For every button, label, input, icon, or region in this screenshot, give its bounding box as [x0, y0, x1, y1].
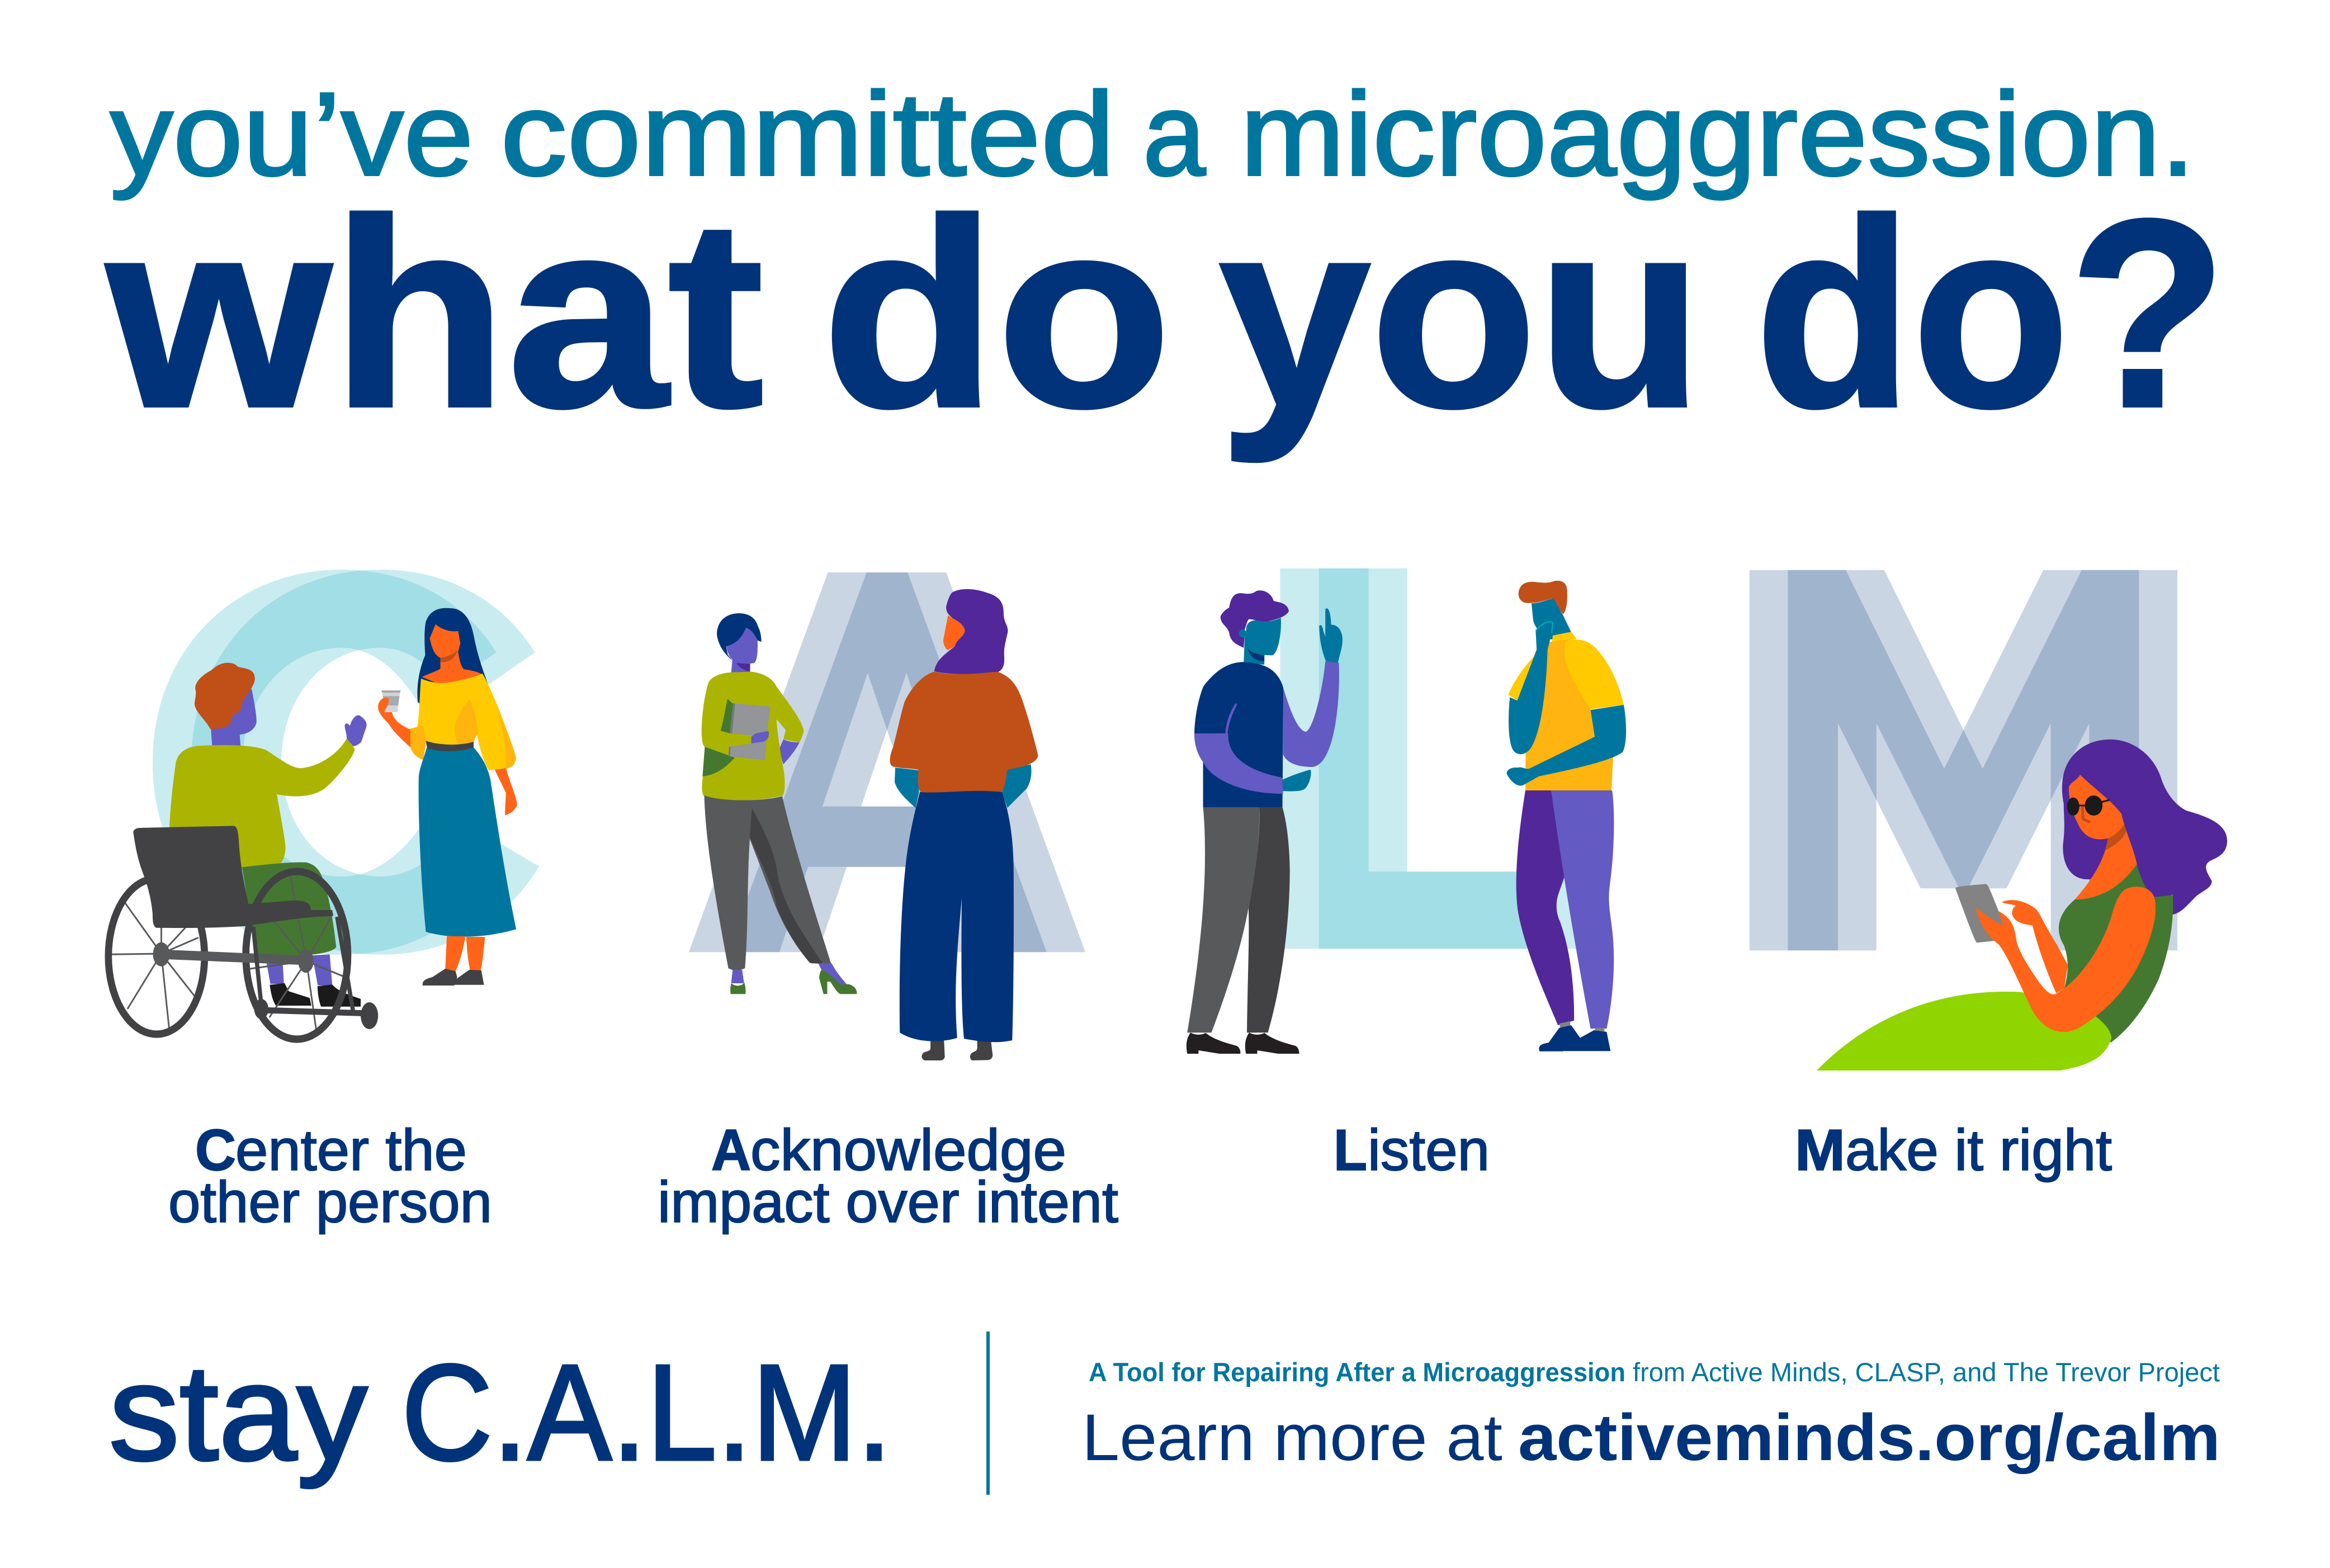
divider line — [986, 1332, 990, 1495]
letter M — [1750, 570, 2177, 950]
caption: acknowledge impact over intent: cknowledge — [750, 1118, 1066, 1183]
figure: person in headscarf seen from behind — [890, 589, 1038, 1060]
title: what do you do? — [102, 164, 2227, 465]
heading: you've committed a microaggression — [110, 68, 2195, 200]
heading: you've committed a microaggression: a — [1143, 68, 1206, 200]
caption: center the other person — [168, 1118, 492, 1235]
heading: you've committed a microaggression: you’ve — [110, 68, 474, 200]
caption: listen: L — [1334, 1118, 1367, 1183]
caption: acknowledge impact over intent: impact over intent — [658, 1170, 1118, 1235]
title: what do you do?: you — [1219, 164, 1703, 465]
title: what do you do?: do? — [1755, 164, 2227, 463]
caption: center the other person: other person — [168, 1170, 492, 1235]
letter A — [689, 572, 1085, 952]
figure: person holding a book — [702, 613, 857, 994]
figure: man with hand on chin — [1507, 581, 1626, 1051]
slogan: stay C.A.L.M.: C.A.L.M. — [401, 1336, 892, 1489]
caption: listen: isten — [1368, 1118, 1490, 1183]
text: learn more at activeminds.org/calm: activeminds.org/calm — [1518, 1401, 2220, 1475]
caption: make it right: ake it right — [1845, 1118, 2112, 1183]
heading: you've committed a microaggression: committed — [500, 68, 1115, 200]
letter C — [153, 570, 539, 955]
text: learn more at activeminds.org/calm — [1082, 1401, 2220, 1475]
figure: woman with sunglasses reading a tablet — [1817, 740, 2227, 1070]
text: tool attribution: A Tool for Repairing After a Microaggression — [1089, 1357, 1625, 1387]
panel: M, make it right illustration — [1750, 570, 2227, 1070]
panel: L, listen illustration — [1187, 569, 1626, 1054]
heading: you've committed a microaggression: microaggression. — [1240, 68, 2195, 200]
caption: acknowledge impact over intent — [658, 1118, 1118, 1235]
title: what do you do?: what — [102, 164, 764, 463]
caption: center the other person: C — [195, 1118, 236, 1183]
text: learn more at activeminds.org/calm: Learn more at — [1082, 1401, 1502, 1475]
caption: center the other person: enter the — [235, 1118, 467, 1183]
panel: A, acknowledge impact illustration — [689, 572, 1085, 1060]
slogan: stay C.A.L.M.: stay — [109, 1336, 367, 1489]
caption: acknowledge impact over intent: A — [711, 1118, 751, 1183]
panel: C, center the other person illustration — [108, 570, 539, 1039]
figure: man raising a finger — [1187, 590, 1343, 1054]
text: tool attribution — [1089, 1357, 2220, 1387]
title: what do you do?: do — [822, 164, 1171, 463]
letter L — [1280, 569, 1577, 949]
text: tool attribution: from Active Minds, CLASP, and The Trevor Project — [1633, 1357, 2220, 1387]
figure: person in wheelchair — [108, 663, 378, 1039]
figure: woman with coffee cup — [378, 608, 517, 986]
slogan: stay C.A.L.M. — [109, 1336, 892, 1489]
caption: make it right: M — [1795, 1118, 1845, 1183]
